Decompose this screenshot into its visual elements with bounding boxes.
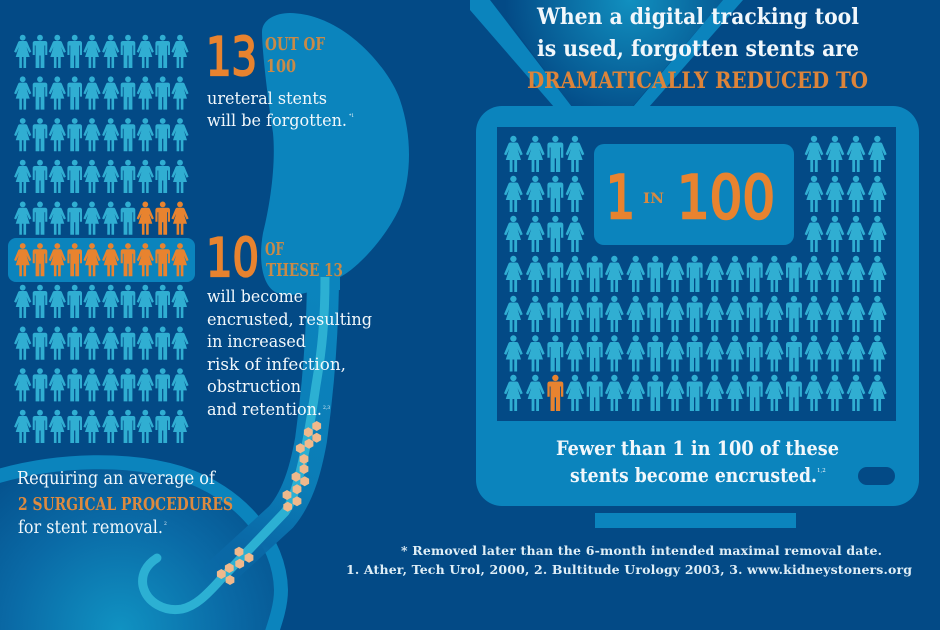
tv screen <box>497 127 896 421</box>
text: encrusted caption: 1,2 <box>817 468 826 474</box>
stat: 13 out of 100: 100 <box>266 57 296 77</box>
illustration: bladder outline <box>0 462 281 630</box>
illustration: stent <box>143 277 325 610</box>
text: forgotten stents: ureteral stents <box>207 89 327 109</box>
callout: 1 in 100 <box>594 144 794 245</box>
illustration: encrustation crystals <box>217 421 321 585</box>
text: encrusted caption <box>556 436 839 487</box>
text: surgical procedures <box>17 469 233 538</box>
stat: 13 out of 100: 13 <box>206 27 257 88</box>
footnotes: 1. Ather, Tech Urol, 2000, 2. Bultitude Urology 2003, 3. www.kidneystoners.org <box>346 562 912 577</box>
stat: 13 out of 100: OUT OF <box>265 35 325 55</box>
stat: 10 of these 13: 10 <box>206 228 259 289</box>
stat: 13 out of 100 <box>206 27 325 88</box>
callout: 1 in 100: IN <box>643 191 664 207</box>
text: encrustation consequences: obstruction <box>207 377 301 397</box>
text: encrusted caption: Fewer than 1 in 100 of these <box>556 436 839 460</box>
highlight bar behind orange row <box>8 238 195 282</box>
footnotes: * Removed later than the 6-month intended maximal removal date. <box>401 543 882 558</box>
chart: 100 people, 13 forgotten <box>14 35 189 443</box>
icon: tv body <box>476 106 919 506</box>
heading: digital tracking tool <box>527 4 868 94</box>
text: encrustation consequences: will become <box>207 287 303 307</box>
text: surgical procedures: 2 <box>164 521 167 527</box>
text: encrustation consequences: risk of infection, <box>207 355 346 375</box>
text: forgotten stents: *1 <box>349 113 354 119</box>
stat: 10 of these 13 <box>206 228 343 289</box>
callout: 1 in 100: 100 <box>677 163 775 233</box>
callout: 1 in 100: 1 <box>606 163 635 233</box>
text: surgical procedures: for stent removal. <box>18 518 163 538</box>
stat: 10 of these 13: OF <box>265 240 284 260</box>
text: encrustation consequences: 2,3 <box>323 405 330 411</box>
text: encrustation consequences: and retention. <box>207 400 322 420</box>
icon: tv stand <box>595 513 796 528</box>
heading: digital tracking tool: DRAMATICALLY REDUCED TO <box>527 68 868 94</box>
heading: digital tracking tool: is used, forgotten stents are <box>537 36 859 62</box>
text: surgical procedures: Requiring an average of <box>17 469 216 489</box>
text: encrustation consequences: in increased <box>207 332 306 352</box>
icon: tv button <box>858 467 895 485</box>
footnotes <box>346 543 912 577</box>
chart: 100 people, 1 forgotten <box>504 136 887 411</box>
text: surgical procedures: 2 SURGICAL PROCEDURES <box>18 495 233 515</box>
icon: tv antenna <box>470 0 743 107</box>
text: encrusted caption: stents become encrusted. <box>570 463 817 487</box>
stat: 10 of these 13: THESE 13 <box>266 261 343 281</box>
text: encrustation consequences: encrusted, resulting <box>207 310 372 330</box>
text: forgotten stents: will be forgotten. <box>207 111 347 131</box>
heading: digital tracking tool: When a digital tracking tool <box>536 4 859 30</box>
text: encrustation consequences <box>207 287 372 420</box>
illustration: kidney and ureter <box>209 13 409 583</box>
text: forgotten stents <box>207 89 354 131</box>
illustration: bladder glow <box>0 462 283 630</box>
